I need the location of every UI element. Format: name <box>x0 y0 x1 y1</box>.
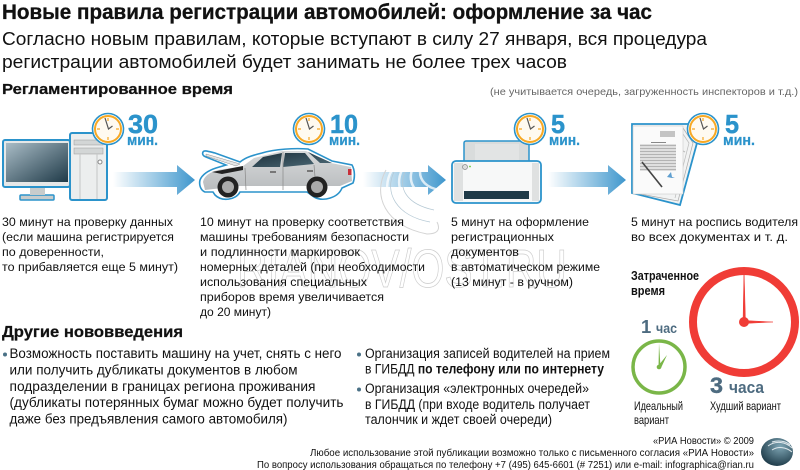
label: 10 min <box>329 109 360 149</box>
label: 1 hour: 1 <box>641 316 651 337</box>
icon: clock 30 min <box>92 114 124 144</box>
text: step 2 <box>200 215 425 319</box>
list: right: Организация «электронных очередей» <box>365 381 589 396</box>
clock: 3 hours <box>693 267 795 373</box>
subtitle: регистрации автомобилей будет занимать не более трех часов <box>2 51 567 72</box>
icon: clock 5 min (printer) <box>514 114 546 144</box>
label: 1 hour: час <box>656 320 677 336</box>
text: step 3: (13 минут - в ручном) <box>451 275 573 289</box>
list: right: в ГИБДД по телефону или по интернету <box>365 362 604 376</box>
icon: clock 10 min <box>294 114 324 144</box>
note: (не учитывается очередь, загруженность инспекторов и т.д.) <box>490 86 798 98</box>
text: step 3: 5 минут на оформление <box>451 215 589 229</box>
icon: clock 5 min (documents) <box>688 114 718 144</box>
text: step 2: 10 минут на проверку соответствия <box>200 215 404 229</box>
text: step 1: по доверенности, <box>2 245 104 259</box>
footer credits <box>257 436 754 470</box>
subtitle: Согласно новым правилам, которые вступают в силу 27 января, вся процедура <box>2 28 708 49</box>
label: 5 min: 5 <box>725 109 739 139</box>
icon: documents <box>632 124 697 205</box>
icon: car <box>200 149 354 199</box>
label: 10 min: 10 <box>330 109 358 139</box>
arrow 3 <box>548 165 626 195</box>
icon: computer <box>3 133 107 200</box>
subtitle <box>2 28 708 72</box>
list: right: в ГИБДД (при входе водитель получает <box>365 397 590 412</box>
label: 3 hours: часа <box>729 378 764 397</box>
heading: other innovations: Другие нововведения <box>2 324 183 341</box>
list: right: Организация записей водителей на прием <box>365 346 610 361</box>
text: step 1: 30 минут на проверку данных <box>2 215 174 229</box>
label: 10 min: мин. <box>329 132 360 149</box>
label: 3 hours <box>710 373 764 398</box>
label: 5 min: мин. <box>723 132 755 149</box>
label: 5 min <box>723 109 755 149</box>
text: step 2: приборов время увеличивается <box>200 290 384 304</box>
label: 30 min: 30 <box>128 109 158 139</box>
watermark: RIANOV/OST.RU <box>237 239 567 299</box>
list: left <box>3 346 344 426</box>
list: right <box>357 346 610 427</box>
list: right: талончик и ждет своей очереди) <box>365 412 552 427</box>
text: step 3: в автоматическом режиме <box>451 260 600 274</box>
title: Новые правила регистрации автомобилей: оформление за час <box>2 1 652 24</box>
heading: regulated time: Регламентированное время <box>2 81 233 98</box>
text: step 4: 5 минут на роспись водителя <box>631 215 798 229</box>
list: left: или получить дубликаты документов в любом <box>10 362 298 378</box>
label: 30 min <box>127 109 158 149</box>
heading: time spent: время <box>631 283 665 298</box>
text: step 3: документов <box>451 245 519 259</box>
clock: 1 hour <box>633 341 685 393</box>
icon: printer <box>452 141 541 203</box>
text: step 2: до 20 минут) <box>200 305 271 319</box>
footer credits: Любое использование этой публикации возможно только с письменного согласия «РИА Новости» <box>310 447 754 459</box>
list: left: даже без предъявления самого автомобиля) <box>10 412 288 426</box>
text: step 2: машины требованиям безопасности <box>200 230 409 244</box>
text: step 3 <box>451 215 600 289</box>
label: 5 min: 5 <box>551 109 565 139</box>
watermark <box>237 170 567 299</box>
label: 5 min: мин. <box>549 132 580 149</box>
text: step 3: регистрационных <box>451 230 555 244</box>
list: left: подразделении в границах региона проживания <box>10 379 316 394</box>
label: worst: Худший вариант <box>710 399 781 413</box>
label: ideal: вариант <box>634 413 669 427</box>
label: 30 min: мин. <box>127 132 158 149</box>
footer credits: «РИА Новости» © 2009 <box>653 436 754 447</box>
text: step 2: номерных деталей (при необходимости <box>200 260 425 274</box>
text: step 1: то прибавляется еще 5 минут) <box>2 260 178 274</box>
text: step 2: и подлинности маркировок <box>200 245 361 259</box>
heading: time spent: Затраченное <box>631 268 699 283</box>
text: step 1: (если машина регистрируется <box>2 230 174 244</box>
logo <box>761 438 793 466</box>
label: 3 hours: 3 <box>710 373 723 398</box>
text: step 4: во всех документах и т. д. <box>631 230 788 244</box>
list: left: (дубликаты потерянных бумаг можно будет получить <box>10 395 344 410</box>
label: ideal <box>634 399 683 427</box>
arrow 2 <box>363 165 446 195</box>
text: step 4 <box>631 215 798 244</box>
arrow 1 <box>113 165 195 195</box>
text: step 2: использования специальных <box>200 275 368 289</box>
label: 5 min <box>549 109 580 149</box>
list: left: Возможность поставить машину на учет, снять с него <box>10 346 342 361</box>
text: step 1 <box>2 215 178 274</box>
label: 1 hour <box>641 316 677 337</box>
label: ideal: Идеальный <box>634 399 683 413</box>
heading: time spent <box>631 268 699 298</box>
